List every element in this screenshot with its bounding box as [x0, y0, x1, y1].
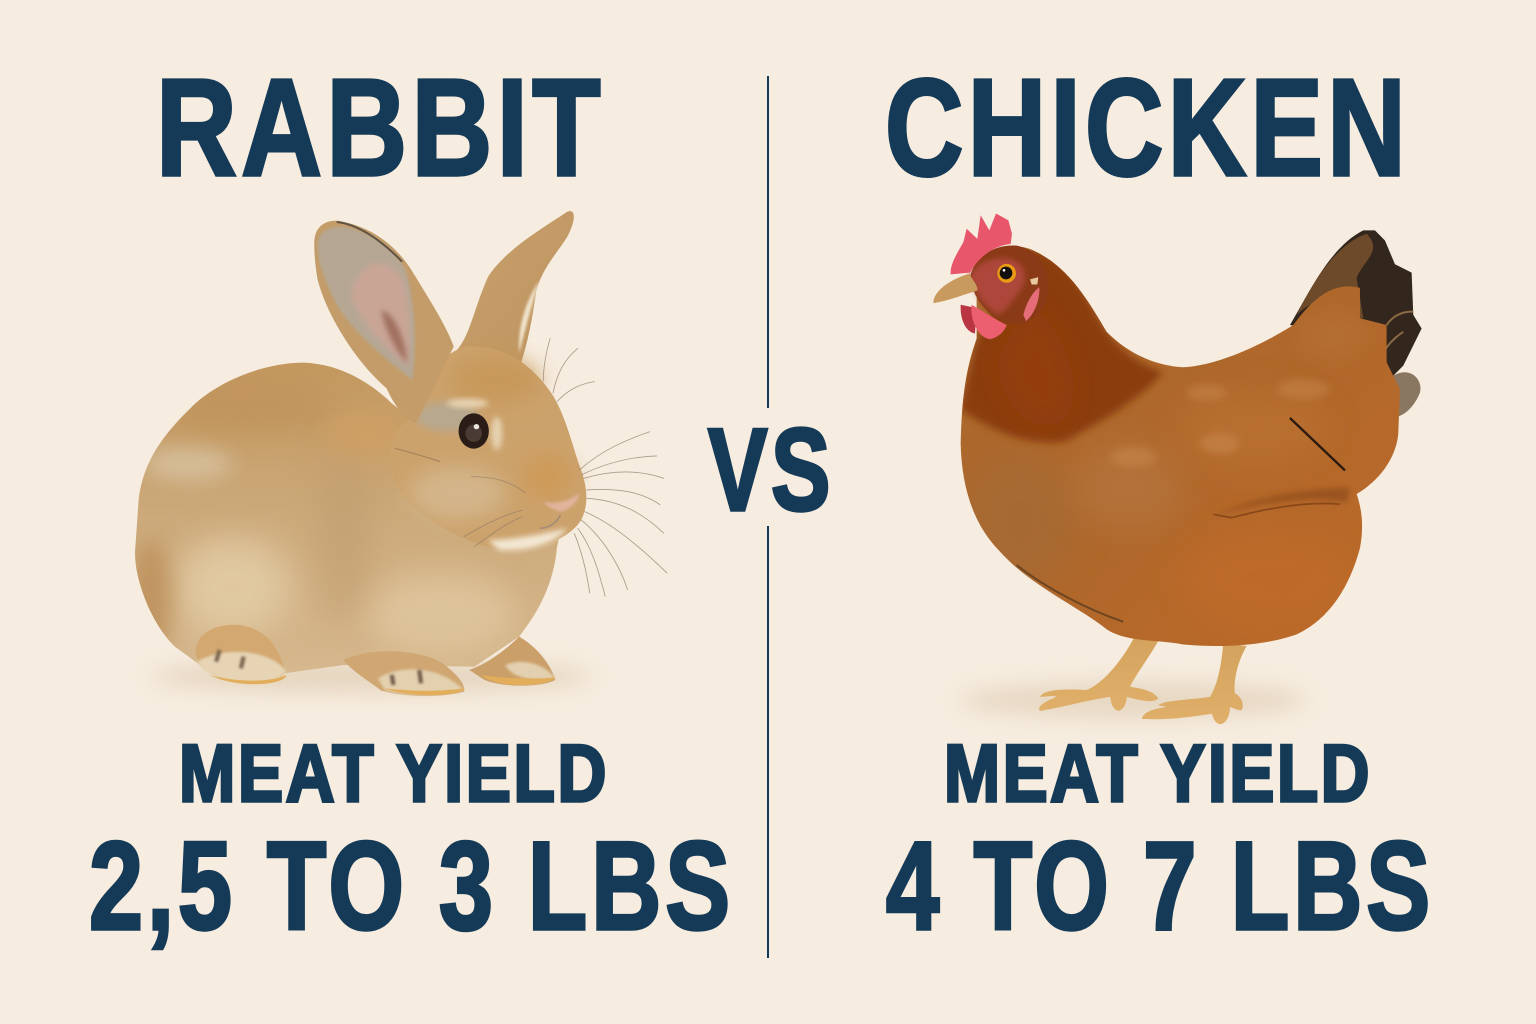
vs label: VS	[708, 404, 834, 535]
divider: upper	[767, 76, 769, 408]
rabbit eye	[459, 413, 489, 449]
rabbit whiskers	[464, 338, 667, 597]
chicken body	[960, 246, 1400, 646]
divider: lower	[767, 526, 769, 958]
rabbit head	[390, 346, 586, 552]
chicken near leg	[1142, 643, 1247, 724]
rabbit left ear	[314, 221, 454, 423]
rabbit right ear	[457, 211, 574, 363]
chicken head	[970, 245, 1048, 324]
chicken wattle	[961, 305, 1007, 339]
heading: rabbit: RABBIT	[156, 51, 605, 205]
chicken yield label: MEAT YIELD	[944, 729, 1372, 819]
chicken beak	[933, 274, 977, 303]
chicken far leg	[1039, 633, 1160, 711]
rabbit far paw	[469, 637, 555, 686]
illustration: chicken	[933, 214, 1422, 724]
chicken floor shadow	[960, 682, 1307, 719]
rabbit yield value: 2,5 TO 3 LBS	[89, 817, 734, 956]
chicken eye	[997, 264, 1016, 283]
rabbit body	[130, 363, 559, 673]
chicken tail	[1290, 230, 1422, 417]
rabbit front paw	[344, 651, 465, 696]
chicken comb	[951, 214, 1012, 274]
rabbit floor shadow	[151, 660, 591, 693]
heading: chicken: CHICKEN	[885, 51, 1410, 205]
rabbit back paw	[195, 625, 287, 684]
rabbit yield label: MEAT YIELD	[179, 729, 609, 819]
illustration: rabbit	[130, 211, 667, 696]
